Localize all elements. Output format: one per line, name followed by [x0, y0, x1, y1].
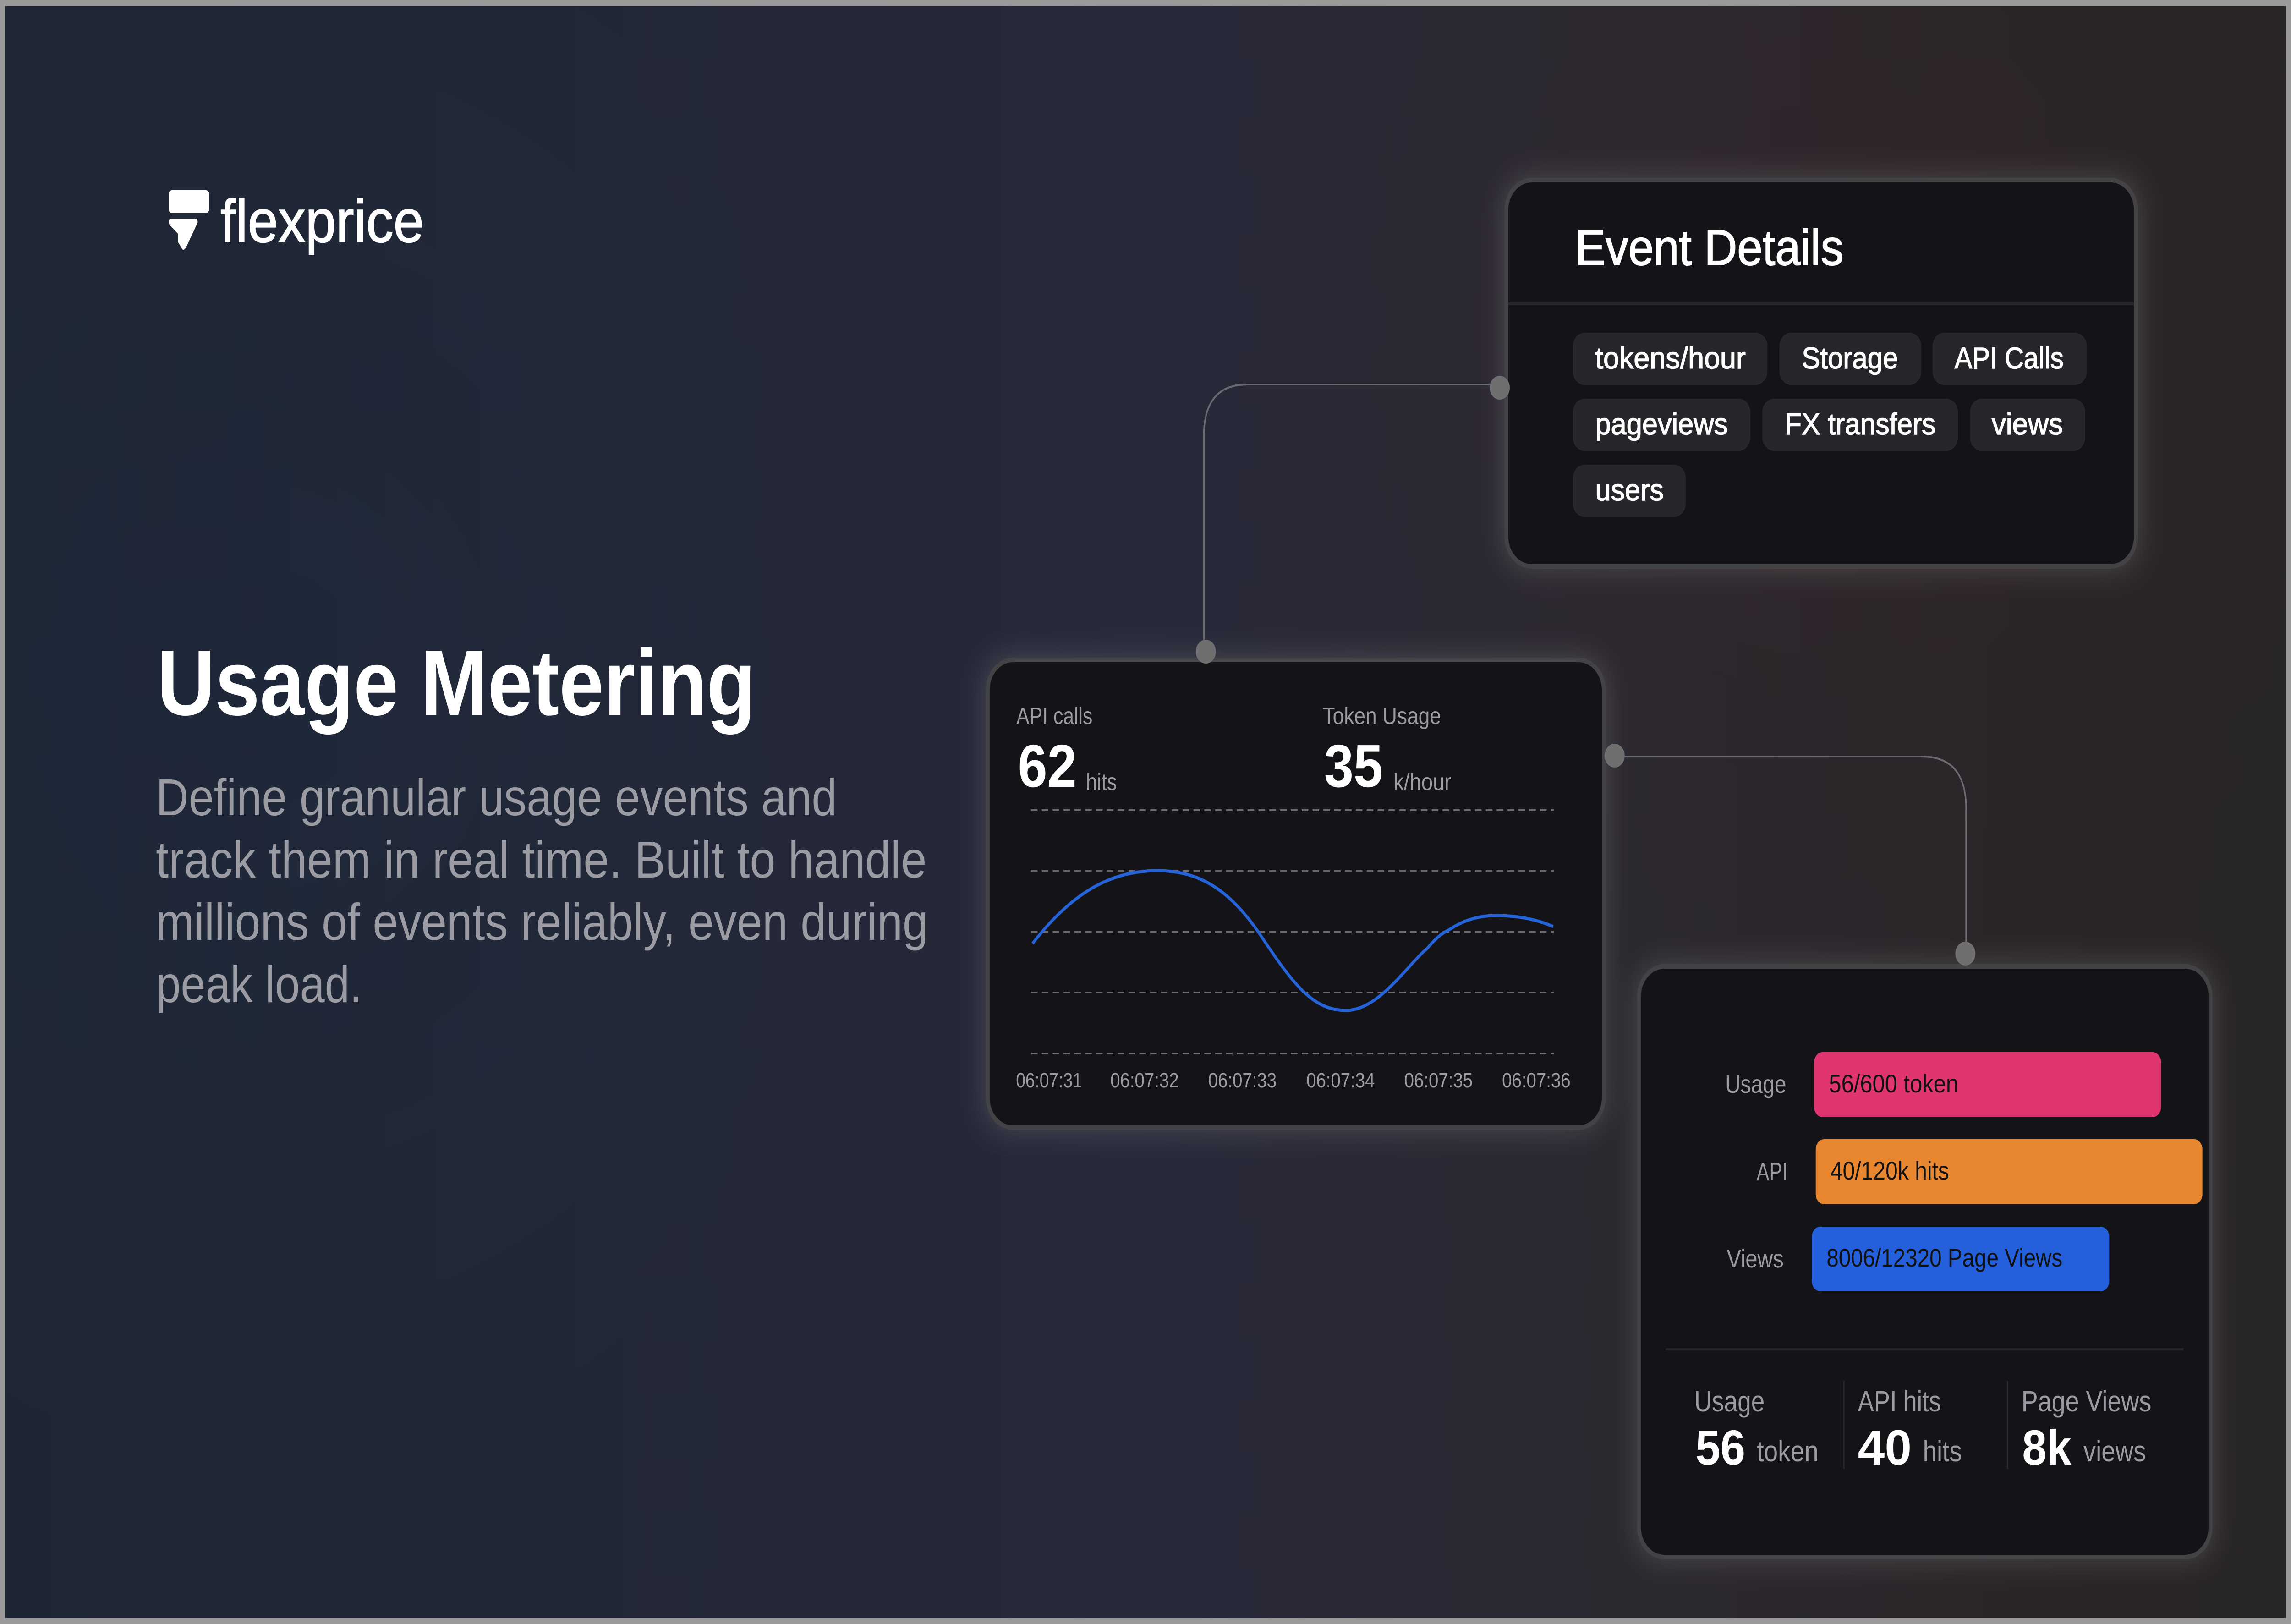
- stat: token usage: Token Usage: [1323, 703, 1441, 730]
- event chips: [1573, 333, 2087, 517]
- stat: API hits total: hits: [1923, 1435, 1962, 1468]
- stat: API hits total: 40: [1858, 1421, 1912, 1476]
- description text block: track them in real time. Built to handle: [156, 831, 926, 889]
- stat: page views total: views: [2083, 1435, 2146, 1468]
- event chips: tokens/hour: [1595, 341, 1746, 375]
- heading: event details: Event Details: [1575, 219, 1843, 276]
- stat: usage total: [1694, 1385, 1819, 1476]
- logo wordmark: flexprice: [220, 187, 424, 255]
- panel: event details: [1502, 176, 2140, 571]
- chart time axis labels: 06:07:35: [1404, 1069, 1473, 1092]
- chart time axis labels: 06:07:31: [1016, 1069, 1082, 1092]
- bar: views: Views: [1727, 1244, 1784, 1273]
- bar: views: 8006/12320 Page Views: [1826, 1243, 2062, 1272]
- event chips: pageviews: [1595, 407, 1728, 441]
- bar: usage: [1725, 1052, 2161, 1117]
- stat: API calls: [1016, 703, 1117, 800]
- event chips: Storage: [1802, 341, 1898, 375]
- description text block: millions of events reliably, even during: [156, 893, 928, 951]
- stat: page views total: Page Views: [2022, 1385, 2151, 1418]
- connector: chart to usage bars: [1615, 757, 1966, 944]
- stat: token usage: 35: [1324, 732, 1383, 800]
- stat: API calls: API calls: [1016, 703, 1092, 730]
- bar: API: 40/120k hits: [1831, 1156, 1949, 1185]
- title: Usage Metering: [157, 631, 756, 735]
- bar: API: API: [1757, 1157, 1787, 1186]
- event chips: API Calls: [1955, 341, 2064, 375]
- stat: API calls: 62: [1018, 732, 1077, 800]
- bar: views: [1727, 1227, 2109, 1291]
- chart time axis labels: 06:07:34: [1306, 1069, 1375, 1092]
- line chart: [1016, 810, 1571, 1092]
- stat: usage total: Usage: [1694, 1385, 1765, 1418]
- description text block: [156, 768, 928, 1014]
- chart time axis labels: 06:07:33: [1208, 1069, 1277, 1092]
- stat: token usage: [1323, 703, 1452, 800]
- event chips: users: [1595, 473, 1664, 507]
- stat: usage total: token: [1757, 1435, 1819, 1468]
- description text block: peak load.: [156, 955, 362, 1014]
- icon: flexprice logo mark: [169, 190, 209, 250]
- chart time axis labels: [1016, 1069, 1571, 1092]
- event chips: FX transfers: [1785, 407, 1935, 441]
- connector dots: [1196, 376, 1975, 966]
- stat: page views total: [2022, 1385, 2151, 1476]
- stat: API hits total: API hits: [1858, 1385, 1941, 1418]
- bar: API: [1757, 1139, 2203, 1204]
- connector: event details to chart: [1204, 384, 1499, 642]
- event chips: views: [1992, 407, 2063, 441]
- stat: usage total: 56: [1695, 1421, 1745, 1476]
- stat: page views total: 8k: [2022, 1421, 2072, 1476]
- chart time axis labels: 06:07:32: [1110, 1069, 1179, 1092]
- stat: API hits total: [1858, 1385, 1962, 1476]
- stat: token usage: k/hour: [1393, 769, 1452, 796]
- panel: usage bars and totals: [1635, 962, 2214, 1562]
- bar: usage: Usage: [1725, 1070, 1787, 1098]
- description text block: Define granular usage events and: [156, 768, 837, 827]
- bar: usage: 56/600 token: [1829, 1069, 1958, 1098]
- panel: usage chart: [984, 655, 1608, 1132]
- chart time axis labels: 06:07:36: [1502, 1069, 1571, 1092]
- stat: API calls: hits: [1086, 769, 1117, 796]
